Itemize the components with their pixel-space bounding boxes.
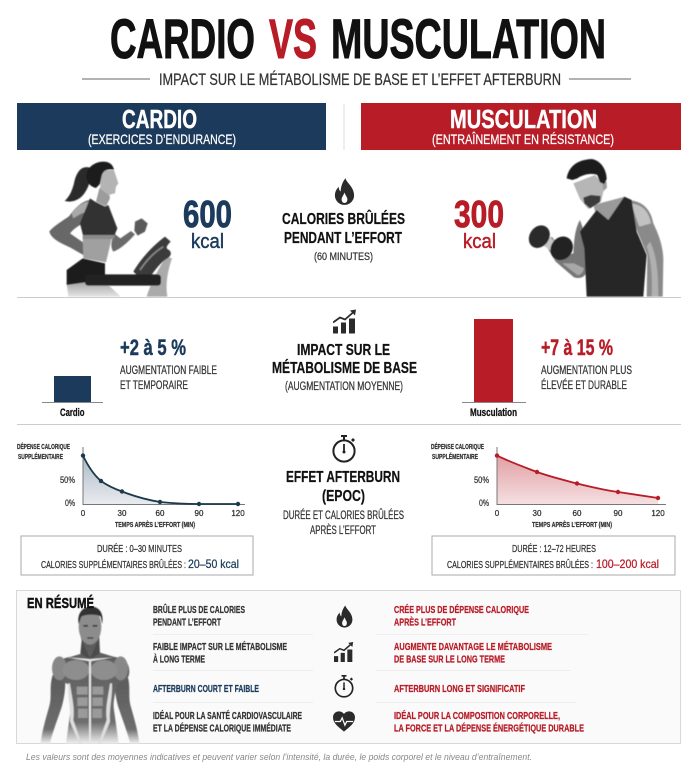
summary row: afterburn: AFTERBURN LONG ET SIGNIFICATIF	[394, 683, 525, 695]
line chart: musculation afterburn: 120	[651, 509, 665, 518]
summary row: metabolism: FAIBLE IMPACT SUR LE MÉTABOLISME	[153, 640, 287, 653]
line chart: musculation afterburn: TEMPS APRÈS L’EFFORT (MIN)	[532, 520, 612, 529]
summary row: calories: CRÉE PLUS DE DÉPENSE CALORIQUE	[394, 603, 529, 616]
heading: calories: PENDANT L’EFFORT	[284, 230, 402, 247]
summary row: metabolism: DE BASE SUR LE LONG TERME	[394, 654, 505, 666]
line chart: cardio afterburn: 30	[118, 509, 127, 518]
line chart: cardio afterburn: SUPPLÉMENTAIRE	[18, 452, 63, 461]
heading: calories: (60 MINUTES)	[314, 251, 373, 263]
line chart: musculation afterburn	[431, 442, 666, 529]
heading: calories: CALORIES BRÛLÉES	[282, 209, 405, 228]
line chart: cardio afterburn: TEMPS APRÈS L’EFFORT (MIN)	[115, 520, 195, 529]
stat: cardio calories: 600	[183, 194, 232, 236]
text block: cardio metabolism: +2 à 5 %	[120, 335, 186, 360]
summary row: metabolism: À LONG TERME	[153, 652, 205, 666]
line chart: musculation afterburn: 0%	[479, 498, 489, 508]
text block: musculation metabolism: ÉLEVÉE ET DURABLE	[541, 377, 627, 392]
line chart: musculation afterburn: 0	[495, 509, 500, 518]
line chart: cardio afterburn: 90	[195, 509, 204, 518]
callout: cardio afterburn: CALORIES SUPPLÉMENTAIRES BRÛLÉES :	[41, 558, 186, 571]
title: CARDIO	[110, 7, 255, 70]
summary row: health: LA FORCE ET LA DÉPENSE ÉNERGÉTIQUE DURABLE	[394, 722, 584, 734]
title	[110, 7, 606, 70]
summary row: calories: APRÈS L’EFFORT	[394, 616, 456, 628]
heading: summary: EN RÉSUMÉ	[27, 595, 94, 612]
summary row: health: IDÉAL POUR LA COMPOSITION CORPORELLE,	[394, 709, 560, 722]
callout: musculation afterburn: CALORIES SUPPLÉMENTAIRES BRÛLÉES :	[447, 558, 593, 571]
line chart: musculation afterburn: 90	[614, 509, 623, 518]
callout: cardio afterburn: DURÉE : 0–30 MINUTES	[97, 542, 182, 555]
stat: musculation calories: 300	[454, 194, 504, 236]
text block: musculation metabolism: +7 à 15 %	[541, 335, 613, 360]
summary row: health: ET LA DÉPENSE CALORIQUE IMMÉDIATE	[153, 722, 291, 734]
callout: cardio afterburn: 20–50 kcal	[188, 557, 239, 571]
panel: musculation header: (ENTRAÎNEMENT EN RÉSISTANCE)	[432, 131, 614, 147]
heading: metabolism: (AUGMENTATION MOYENNE)	[285, 381, 403, 393]
icon: growth chart	[333, 310, 356, 334]
heading: metabolism: IMPACT SUR LE	[297, 342, 390, 359]
heading: metabolism	[272, 342, 417, 393]
illustration: muscular torso	[41, 607, 139, 743]
subtitle: IMPACT SUR LE MÉTABOLISME DE BASE ET L’EFFET AFTERBURN	[159, 70, 561, 89]
panel: cardio header: (EXERCICES D’ENDURANCE)	[88, 131, 236, 147]
panel: cardio header: CARDIO	[122, 104, 197, 134]
summary row: afterburn: AFTERBURN COURT ET FAIBLE	[153, 683, 259, 695]
callout: cardio afterburn	[21, 536, 253, 575]
summary row: health: IDÉAL POUR LA SANTÉ CARDIOVASCULAIRE	[153, 709, 302, 722]
summary row: calories: PENDANT L’EFFORT	[153, 616, 221, 628]
callout: musculation afterburn: DURÉE : 12–72 HEURES	[512, 542, 596, 555]
illustration: man lifting dumbbell	[525, 159, 663, 297]
icon: stopwatch	[333, 435, 355, 462]
illustration: woman running on treadmill	[49, 162, 172, 297]
line chart: musculation afterburn: 50%	[474, 475, 489, 485]
line chart: cardio afterburn: 50%	[60, 475, 75, 485]
bar chart: musculation metabolism: Musculation	[470, 407, 517, 419]
stat: cardio calories	[183, 194, 232, 253]
line chart: musculation afterburn: 30	[533, 509, 542, 518]
callout: musculation afterburn: 100–200 kcal	[596, 557, 659, 571]
text block: cardio metabolism: ET TEMPORAIRE	[120, 378, 188, 392]
line chart: cardio afterburn: 0%	[65, 498, 75, 508]
bar chart: cardio metabolism	[42, 376, 103, 419]
panel: summary	[16, 590, 680, 744]
line chart: cardio afterburn: 0	[81, 509, 86, 518]
summary row: metabolism: AUGMENTE DAVANTAGE LE MÉTABOLISME	[394, 640, 552, 653]
summary row: calories: BRÛLE PLUS DE CALORIES	[153, 603, 245, 616]
line chart: cardio afterburn: DÉPENSE CALORIQUE	[17, 442, 70, 451]
bar chart: cardio metabolism: Cardio	[60, 407, 85, 419]
line chart: cardio afterburn: 120	[231, 509, 245, 518]
bar chart: musculation metabolism	[462, 319, 526, 419]
text block: cardio metabolism: AUGMENTATION FAIBLE	[120, 363, 217, 377]
icon: flame	[335, 178, 354, 205]
heading: afterburn: DURÉE ET CALORIES BRÛLÉES	[283, 509, 404, 522]
panel: cardio header	[17, 103, 326, 150]
heading: afterburn: APRÈS L’EFFORT	[310, 524, 376, 537]
heading: afterburn: EFFET AFTERBURN	[286, 469, 400, 486]
summary row: afterburn	[153, 675, 525, 697]
stat: musculation calories: kcal	[463, 231, 496, 253]
summary row: metabolism	[153, 640, 552, 666]
line chart: musculation afterburn: 60	[573, 509, 582, 518]
line chart: musculation afterburn: DÉPENSE CALORIQUE	[431, 442, 484, 451]
panel: musculation header: MUSCULATION	[450, 104, 597, 134]
title: VS	[269, 7, 317, 70]
callout: musculation afterburn	[432, 536, 675, 575]
text block: cardio metabolism	[120, 335, 217, 392]
text block: musculation metabolism: AUGMENTATION PLUS	[541, 363, 632, 377]
heading: metabolism: MÉTABOLISME DE BASE	[272, 358, 417, 377]
stat: cardio calories: kcal	[191, 231, 224, 253]
stat: musculation calories	[454, 194, 504, 253]
heading: afterburn	[283, 469, 404, 537]
panel: musculation header	[361, 103, 681, 150]
line chart: cardio afterburn	[17, 442, 245, 529]
heading: calories	[282, 209, 405, 263]
text block: musculation metabolism	[541, 335, 632, 392]
summary row: health	[153, 709, 584, 734]
heading: afterburn: (EPOC)	[322, 488, 365, 505]
line chart: musculation afterburn: SUPPLÉMENTAIRE	[432, 452, 478, 461]
summary row: calories	[153, 603, 529, 628]
footnote: Les valeurs sont des moyennes indicatives et peuvent varier selon l’intensité, la durée, le poids corporel et le niveau d’entraînement.	[26, 752, 532, 763]
line chart: cardio afterburn: 60	[156, 509, 165, 518]
